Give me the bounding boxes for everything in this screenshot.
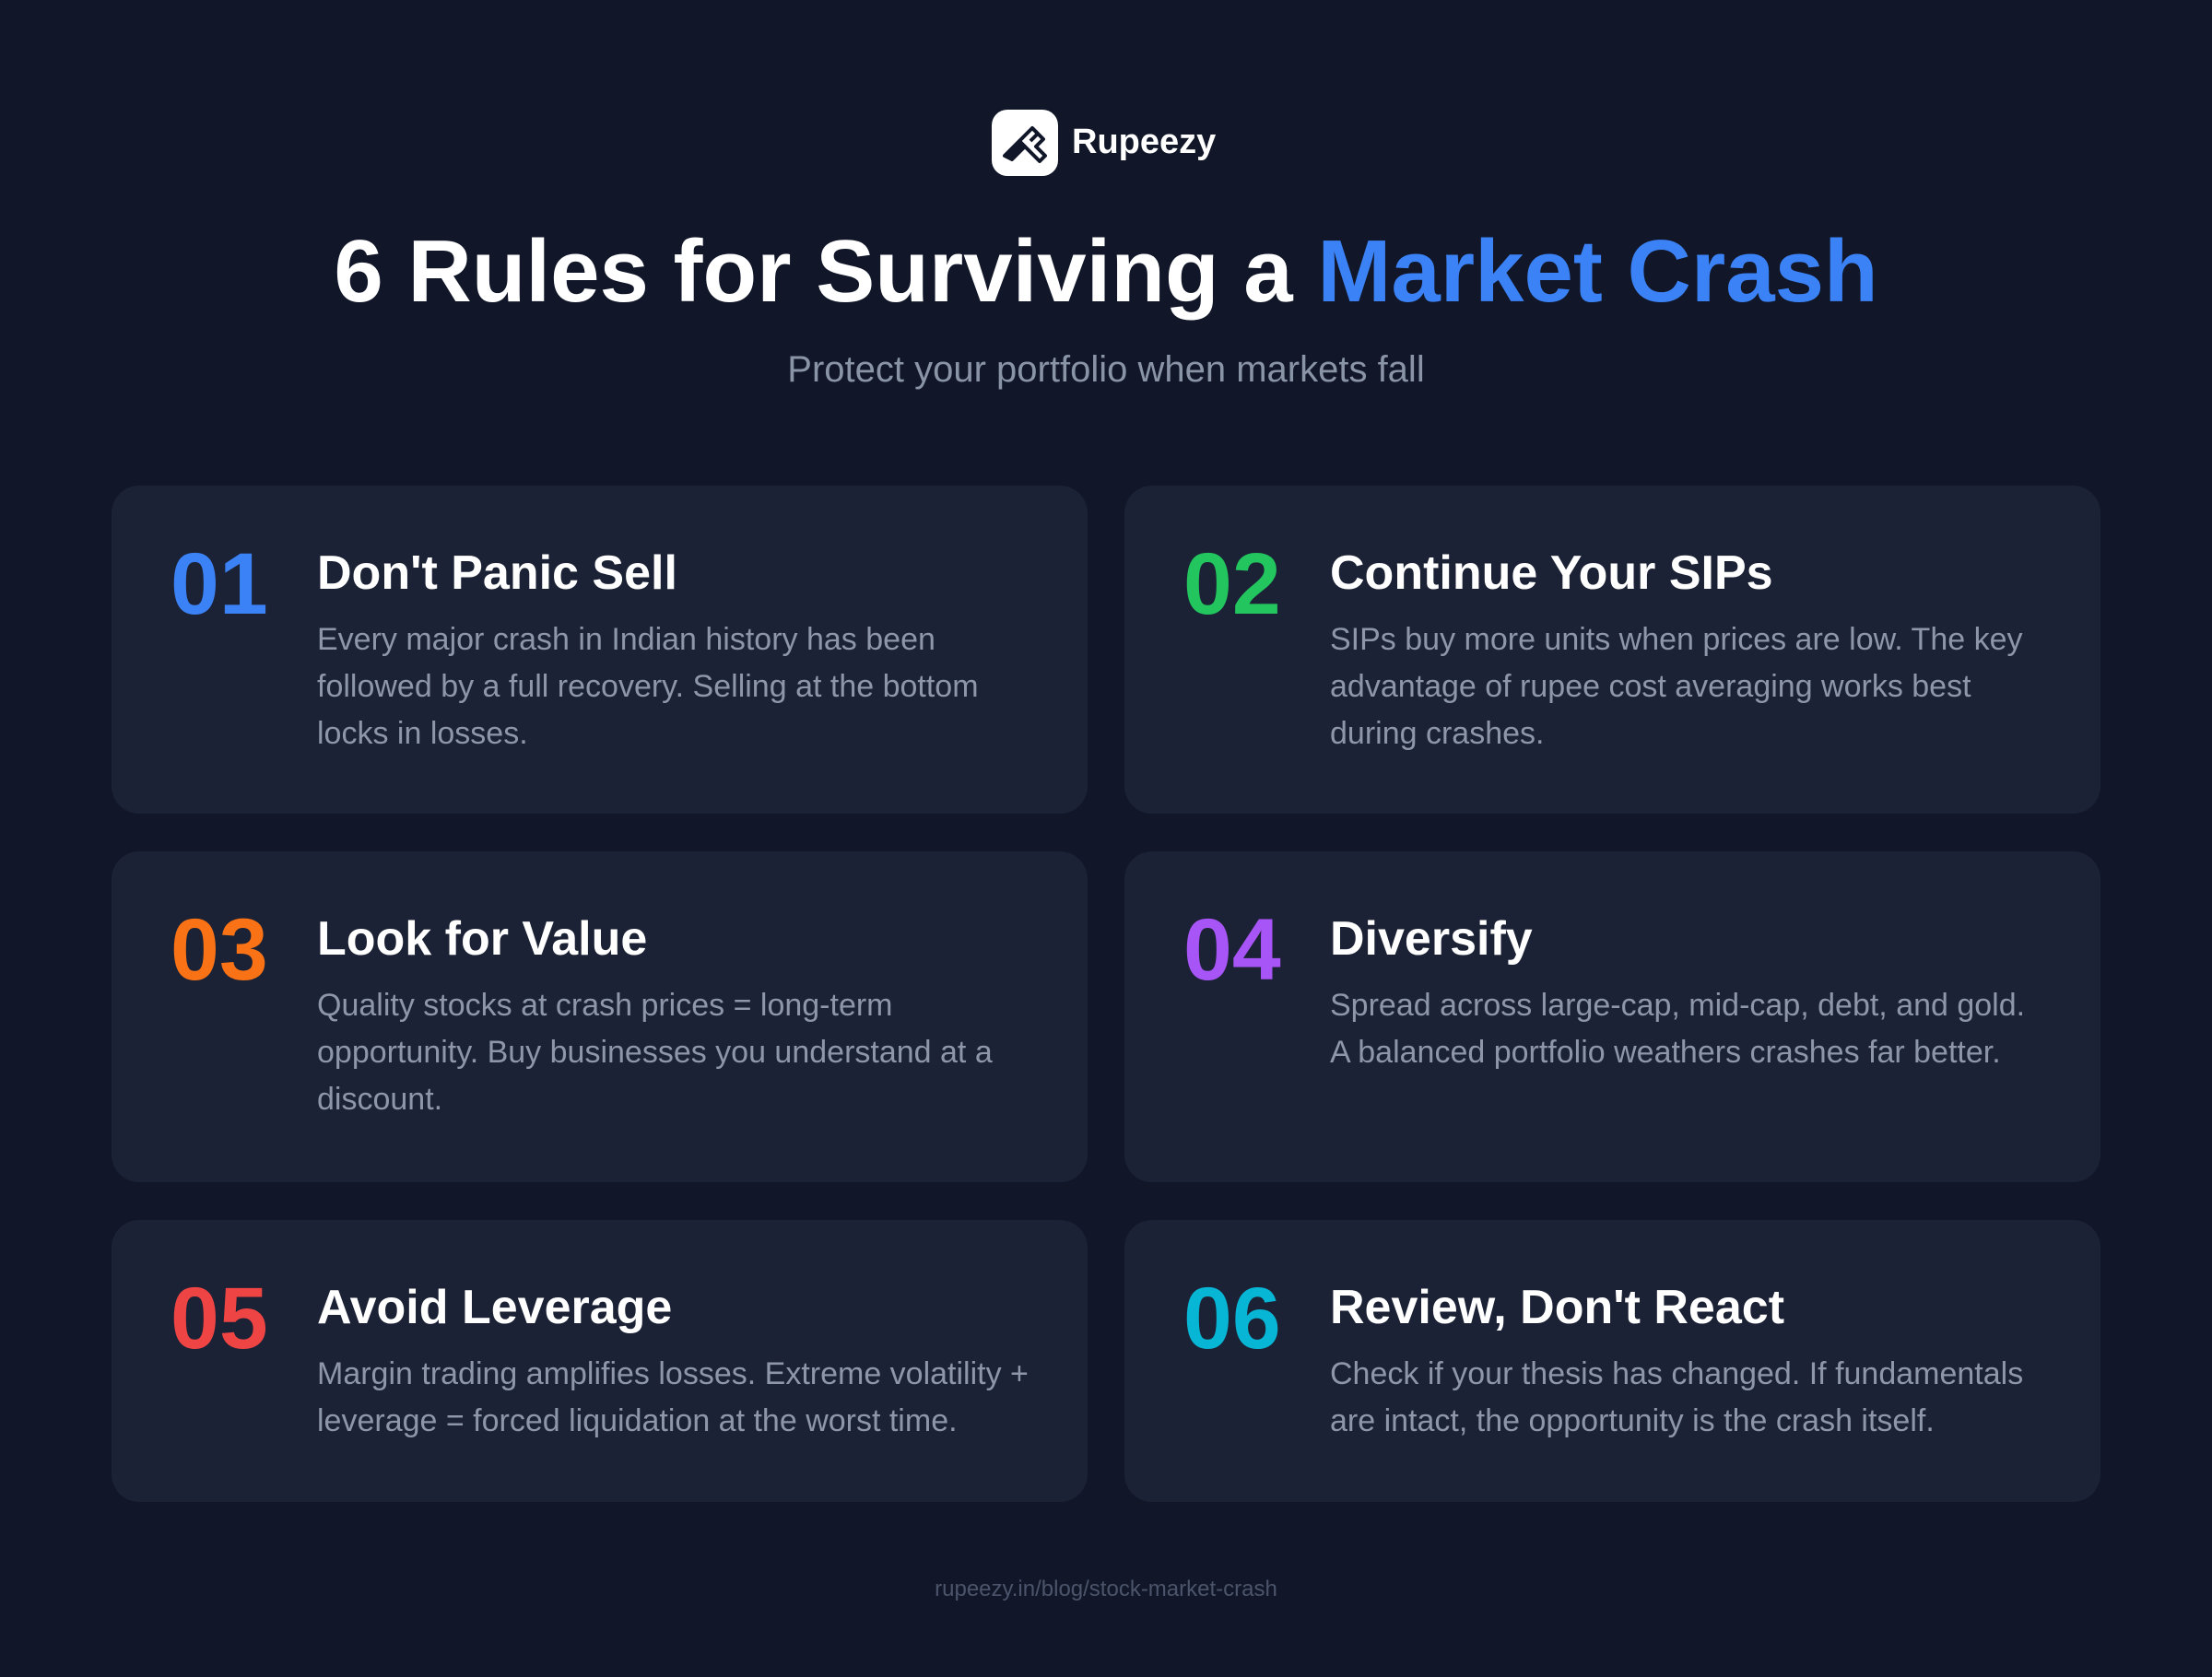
number 04: 04: [1183, 901, 1281, 999]
text: Every major crash in Indian history has been: [317, 622, 935, 657]
number 03: 03: [171, 901, 268, 999]
panel: rule 04: [1124, 851, 2100, 1182]
number 02: 02: [1183, 535, 1281, 633]
text: advantage of rupee cost averaging works best: [1330, 669, 1971, 704]
text: during crashes.: [1330, 716, 1544, 751]
brand name: Rupeezy: [1072, 123, 1216, 161]
number 01: 01: [171, 535, 268, 633]
heading: Review, Don't React: [1330, 1281, 1784, 1334]
heading: Avoid Leverage: [317, 1281, 672, 1334]
text: [1330, 622, 2023, 751]
text: Margin trading amplifies losses. Extreme volatility +: [317, 1356, 1029, 1391]
text: Check if your thesis has changed. If fundamentals: [1330, 1356, 2023, 1391]
heading: Continue Your SIPs: [1330, 546, 1773, 600]
panel: rule 01: [112, 486, 1088, 814]
text: Spread across large-cap, mid-cap, debt, and gold.: [1330, 988, 2025, 1023]
text: [317, 1356, 1029, 1438]
text: [1330, 1356, 2023, 1438]
panel: rule 05: [112, 1220, 1088, 1502]
heading: Look for Value: [317, 912, 647, 966]
text: are intact, the opportunity is the crash itself.: [1330, 1403, 1935, 1438]
panel: rule 03: [112, 851, 1088, 1182]
text: [317, 988, 993, 1117]
text: followed by a full recovery. Selling at the bottom: [317, 669, 979, 704]
text: leverage = forced liquidation at the worst time.: [317, 1403, 958, 1438]
text: opportunity. Buy businesses you understand at a: [317, 1035, 993, 1070]
text: [1330, 988, 2025, 1070]
text: discount.: [317, 1082, 442, 1117]
heading: Diversify: [1330, 912, 1533, 966]
number 06: 06: [1183, 1270, 1281, 1367]
text: Quality stocks at crash prices = long-term: [317, 988, 893, 1023]
subtitle: Protect your portfolio when markets fall: [787, 349, 1425, 390]
panel: rule 06: [1124, 1220, 2100, 1502]
footer url: rupeezy.in/blog/stock-market-crash: [935, 1577, 1277, 1601]
text: locks in losses.: [317, 716, 528, 751]
panel: rule 02: [1124, 486, 2100, 814]
number 05: 05: [171, 1270, 268, 1367]
text: A balanced portfolio weathers crashes far better.: [1330, 1035, 2001, 1070]
logo: [992, 110, 1216, 176]
title: 6 Rules for Surviving a Market Crash: [334, 222, 1878, 321]
text: SIPs buy more units when prices are low. The key: [1330, 622, 2023, 657]
icon: rupeezy mark: [992, 110, 1058, 176]
text: [317, 622, 979, 751]
heading: Don't Panic Sell: [317, 546, 677, 600]
